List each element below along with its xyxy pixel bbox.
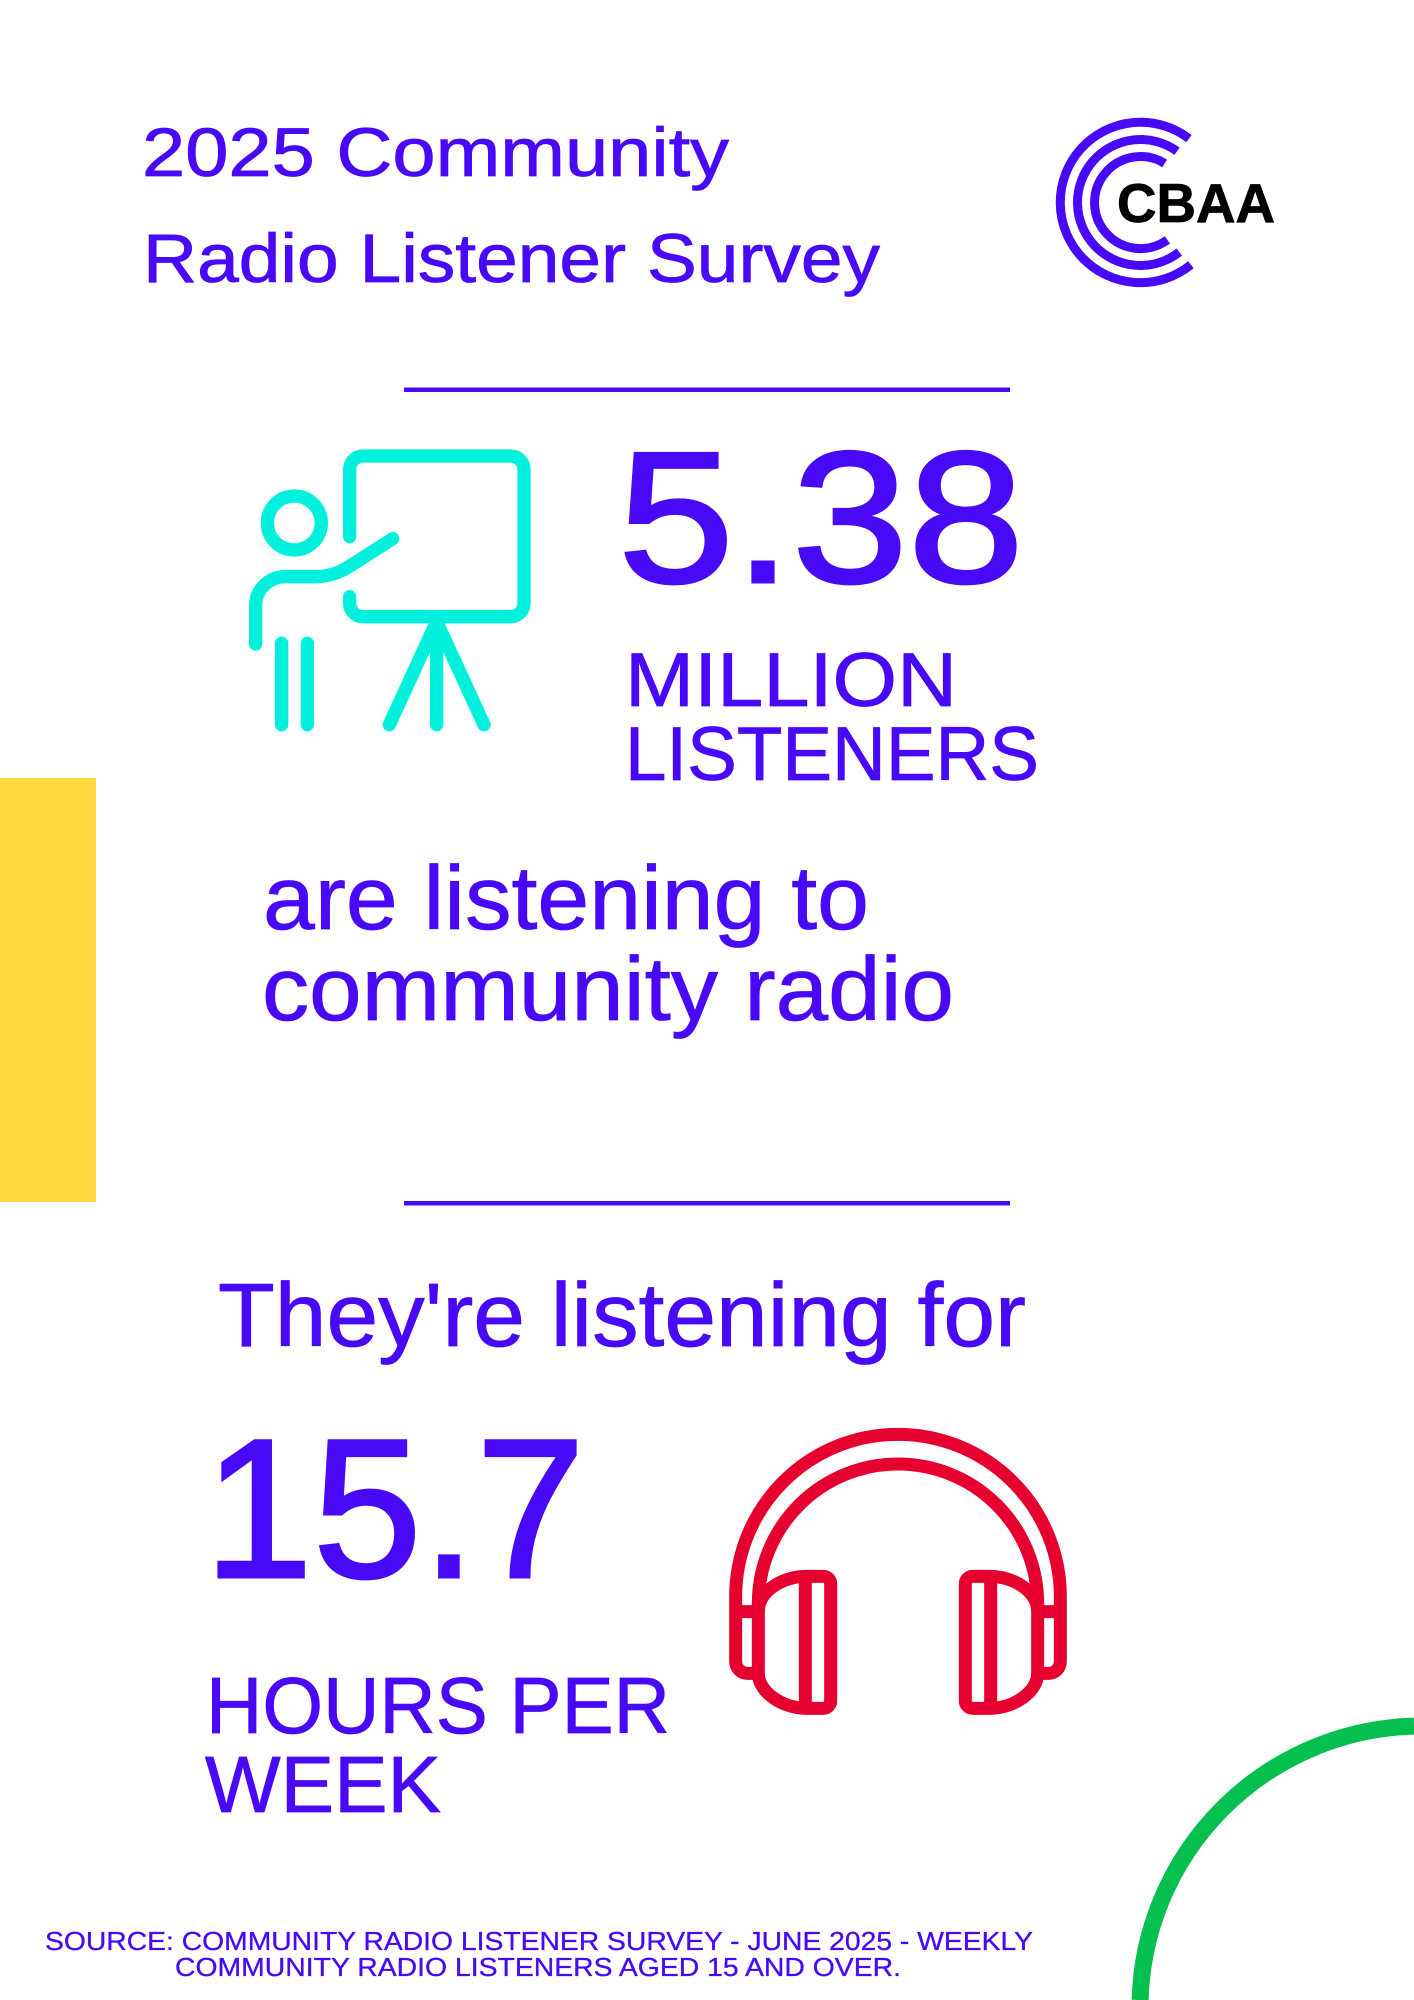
source note (45, 1926, 1033, 1982)
text: they're listening for: They're listening for (218, 1266, 1026, 1366)
label: million listeners: MILLION (625, 638, 957, 723)
text: are listening to community radio: are listening to (263, 849, 869, 949)
label: hours per week: HOURS PER (206, 1661, 670, 1750)
CBAA logo: CBAA (1117, 172, 1275, 234)
title (142, 114, 881, 297)
source note: COMMUNITY RADIO LISTENERS AGED 15 AND OVER. (175, 1952, 901, 1982)
label: hours per week (205, 1661, 670, 1829)
source note: SOURCE: COMMUNITY RADIO LISTENER SURVEY - JUNE 2025 - WEEKLY (45, 1926, 1033, 1956)
icon: presenter at board (256, 456, 524, 725)
label: million listeners (625, 638, 1039, 797)
text: are listening to community radio (262, 849, 954, 1040)
statistic: 15.7: 15.7 (204, 1398, 585, 1619)
yellow side block (0, 778, 96, 1202)
divider line bottom (404, 1201, 1010, 1206)
label: hours per week: WEEK (205, 1740, 441, 1829)
text: are listening to community radio: community radio (262, 940, 954, 1040)
title: Radio Listener Survey (143, 220, 881, 297)
divider line top (404, 388, 1010, 392)
label: million listeners: LISTENERS (625, 712, 1039, 797)
title: 2025 Community (142, 114, 730, 191)
green corner arc (1140, 1726, 1414, 2000)
icon: headphones (736, 1434, 1060, 1708)
CBAA logo (1060, 122, 1275, 283)
statistic: 5.38: 5.38 (618, 413, 1024, 622)
